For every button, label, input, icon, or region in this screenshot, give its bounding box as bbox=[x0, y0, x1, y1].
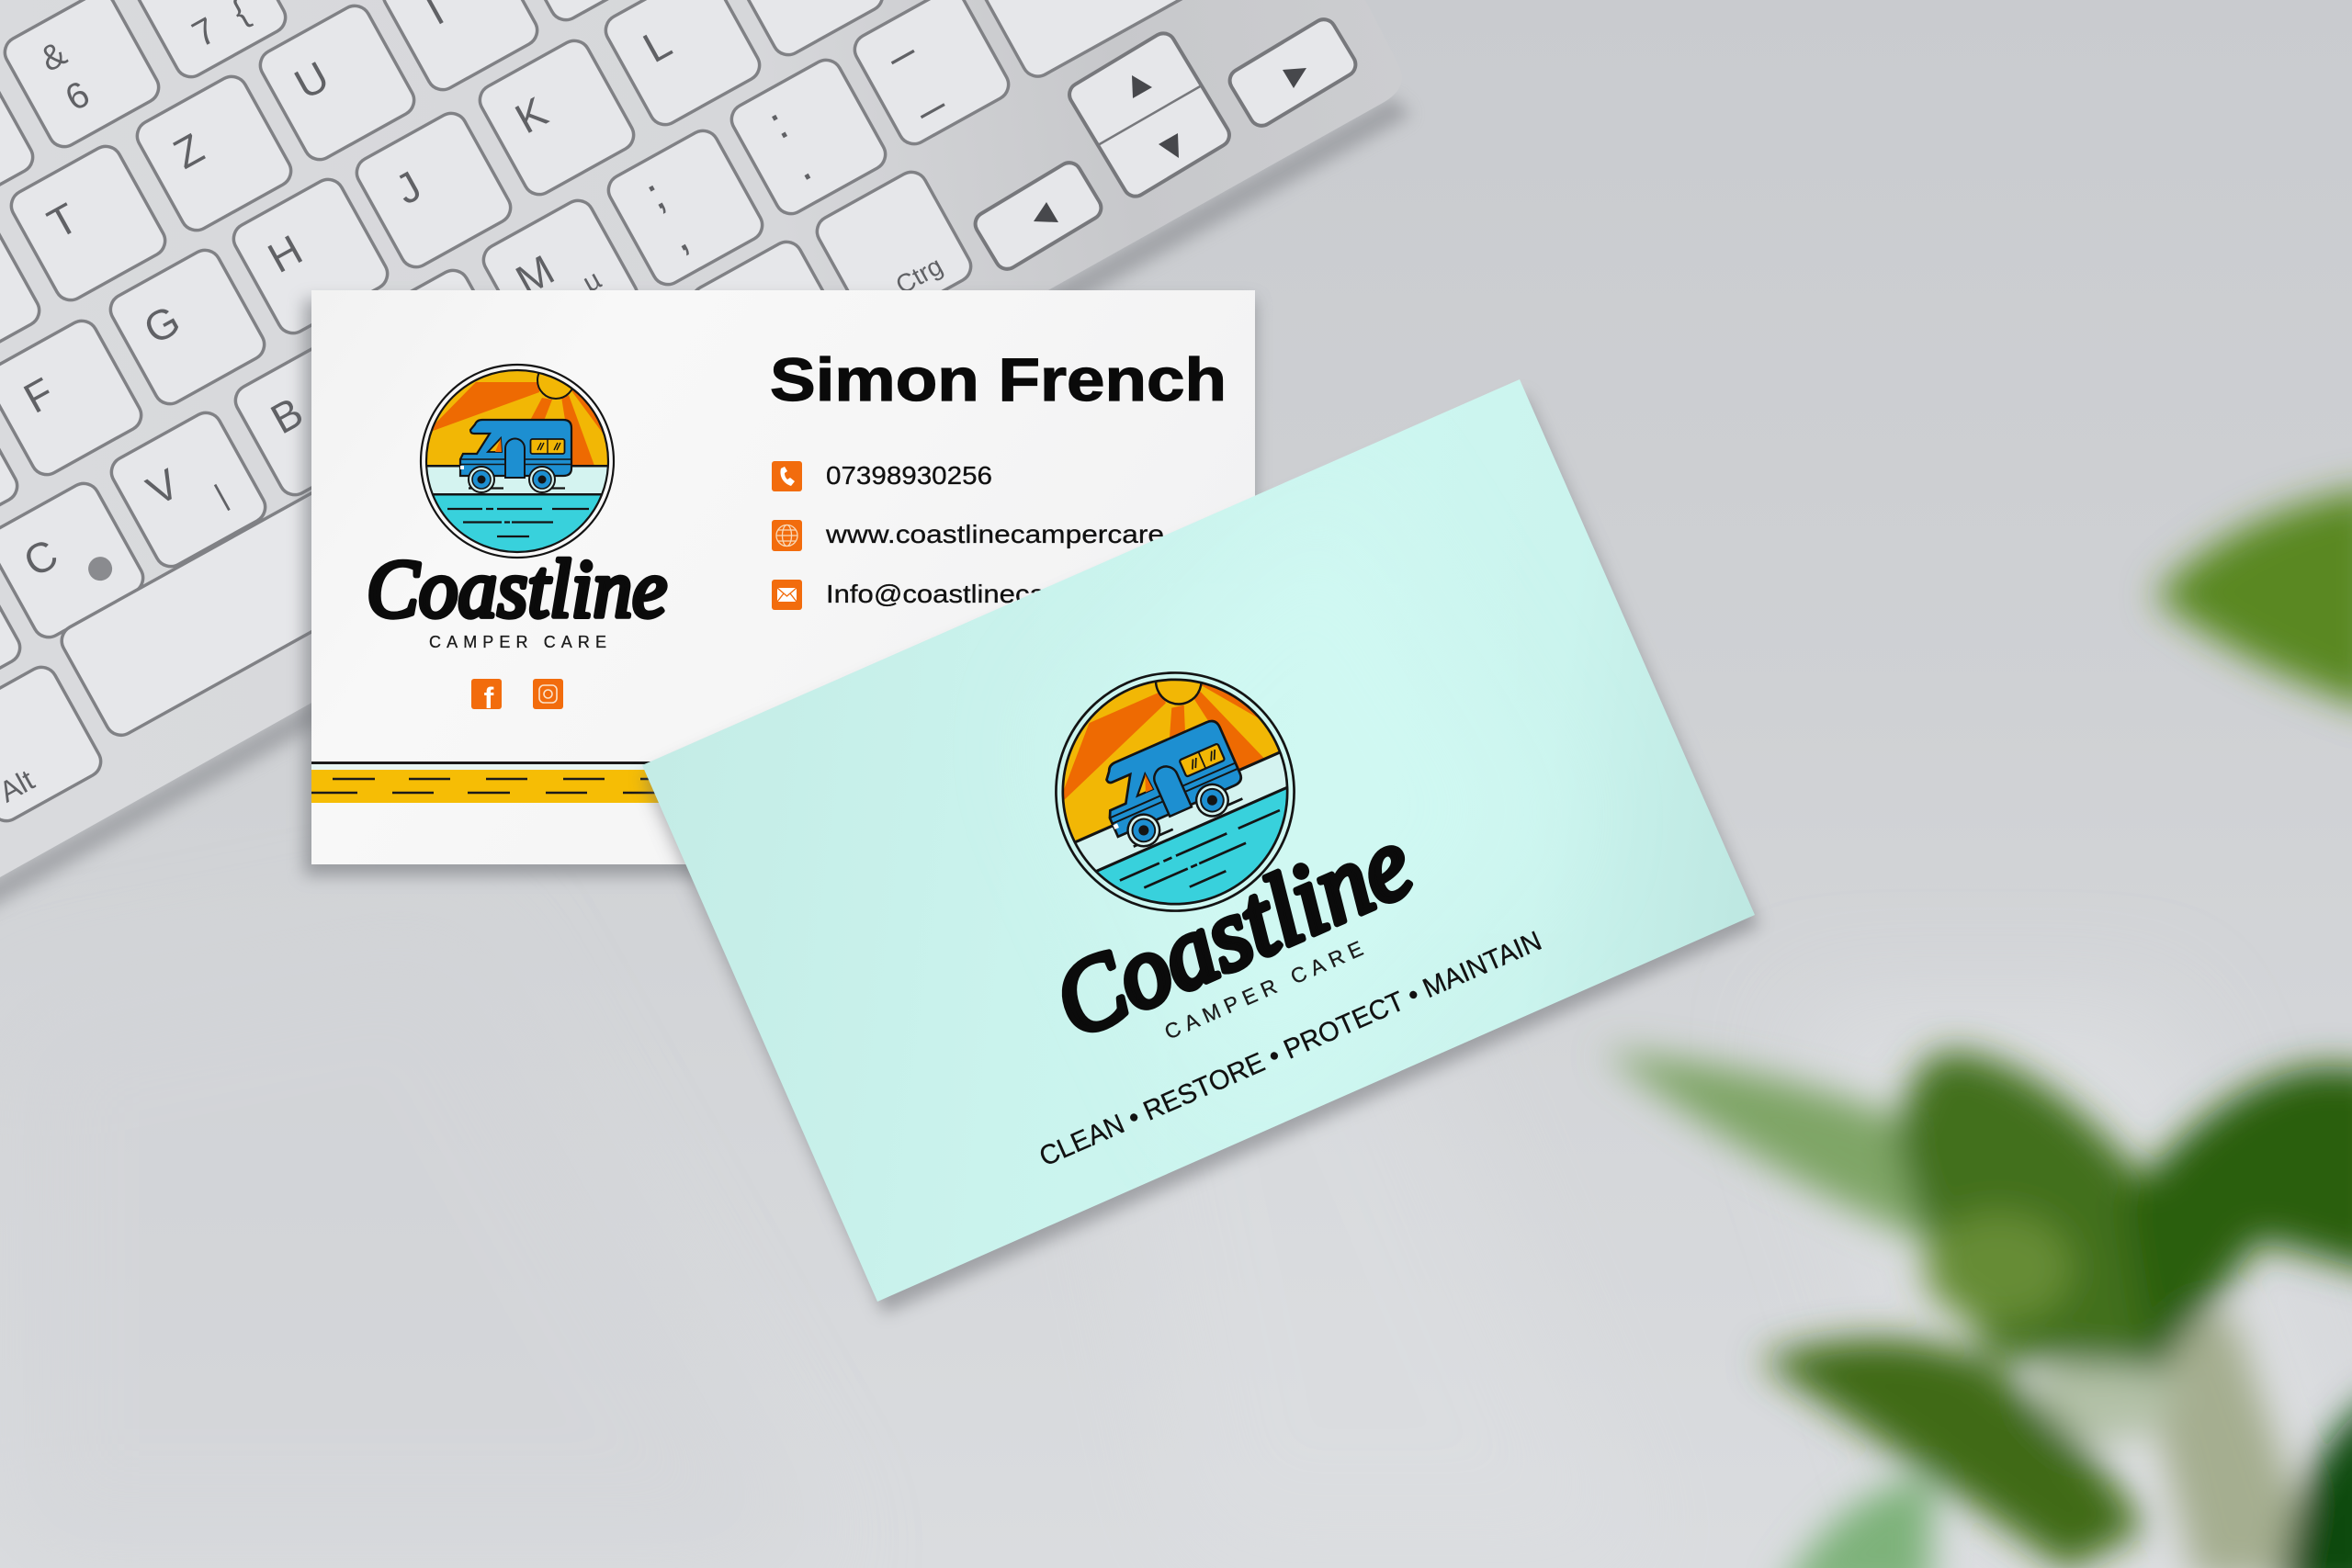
keys row 4: , bbox=[660, 210, 696, 262]
leaf: central highlight bbox=[1925, 1213, 2072, 1323]
keys row 4: ; bbox=[637, 168, 673, 220]
white business card shadow bbox=[304, 299, 1255, 875]
keys row 3: J bbox=[387, 162, 429, 213]
arrow keys bbox=[971, 15, 1360, 274]
icon: mail bbox=[772, 580, 802, 610]
keys row 2: U bbox=[287, 51, 336, 108]
keys row 4: . bbox=[783, 140, 820, 191]
keys row 1: 7 bbox=[186, 10, 223, 55]
keys row 1 bbox=[0, 0, 291, 222]
keys row 4: C bbox=[16, 529, 65, 586]
logo subtitle: CAMPER CARE bbox=[1161, 936, 1366, 1044]
keys row 1: & bbox=[34, 35, 74, 80]
keys row 3: F bbox=[16, 368, 62, 423]
logo wordmark: Coastline bbox=[1038, 805, 1428, 1060]
keys row 1: 6 bbox=[59, 73, 96, 118]
keys row 3: L bbox=[635, 18, 679, 72]
tagline: CLEAN • RESTORE • PROTECT • MAINTAIN bbox=[1035, 926, 1546, 1172]
keys row 4: | bbox=[209, 479, 233, 513]
keys row 4: M bbox=[508, 245, 561, 304]
keys row 2 bbox=[0, 0, 666, 376]
keys row 2: T bbox=[40, 194, 85, 248]
keys row 3: G bbox=[136, 296, 187, 354]
leaf: lower bbox=[1759, 1339, 2145, 1568]
keyboard bbox=[0, 0, 1411, 923]
road stripe bbox=[311, 761, 1255, 803]
leaf: stem area bbox=[2132, 1314, 2324, 1568]
keys row 4: : bbox=[760, 97, 796, 149]
leaf: long pale left bbox=[1603, 1052, 1966, 1258]
leaf: bottom right dark bbox=[2283, 1387, 2352, 1568]
icon: facebook: f bbox=[484, 682, 494, 715]
leaf: bottom pale bbox=[1778, 1479, 1934, 1568]
keys row 5 bbox=[0, 166, 977, 827]
keys row 4: B bbox=[263, 388, 311, 443]
keys row 3 bbox=[0, 0, 1249, 551]
panel: white business card bbox=[311, 290, 1255, 864]
keys row 5: Ctrg bbox=[891, 251, 947, 299]
keys row 3: K bbox=[507, 87, 555, 142]
website: www.coastlinecampercare bbox=[825, 520, 1164, 548]
email: Info@coastlinecampercare bbox=[826, 580, 1166, 608]
keys row 2: Z bbox=[165, 124, 211, 178]
phone number: 07398930256 bbox=[826, 461, 992, 490]
leaf: central bbox=[1897, 1051, 2168, 1369]
keys row 4: _ bbox=[897, 62, 946, 119]
logo subtitle: CAMPER CARE bbox=[429, 633, 606, 651]
icon: instagram bbox=[533, 679, 563, 709]
keys row 4 bbox=[0, 0, 1014, 713]
plant: blurred foreground leaves bbox=[1603, 487, 2352, 1568]
keys row 3: H bbox=[260, 225, 310, 282]
logo wordmark: Coastline bbox=[367, 544, 667, 635]
logo badge bbox=[1017, 632, 1332, 950]
logo badge bbox=[421, 362, 614, 558]
leaf: right arm bbox=[2122, 1066, 2352, 1378]
name heading: Simon French bbox=[770, 345, 1227, 413]
keys row 4: µ bbox=[578, 265, 606, 299]
icon: facebook bbox=[471, 679, 502, 715]
leaf: top right bbox=[2154, 487, 2352, 712]
leaf: pale gap bbox=[2035, 1350, 2173, 1442]
keys row 4: – bbox=[877, 25, 925, 83]
mint card shadow bbox=[643, 395, 1759, 1314]
panel: mint business card bbox=[642, 379, 1755, 1302]
keys row 4: V bbox=[139, 459, 187, 514]
icon: phone bbox=[772, 461, 802, 491]
icon: globe bbox=[772, 520, 802, 551]
